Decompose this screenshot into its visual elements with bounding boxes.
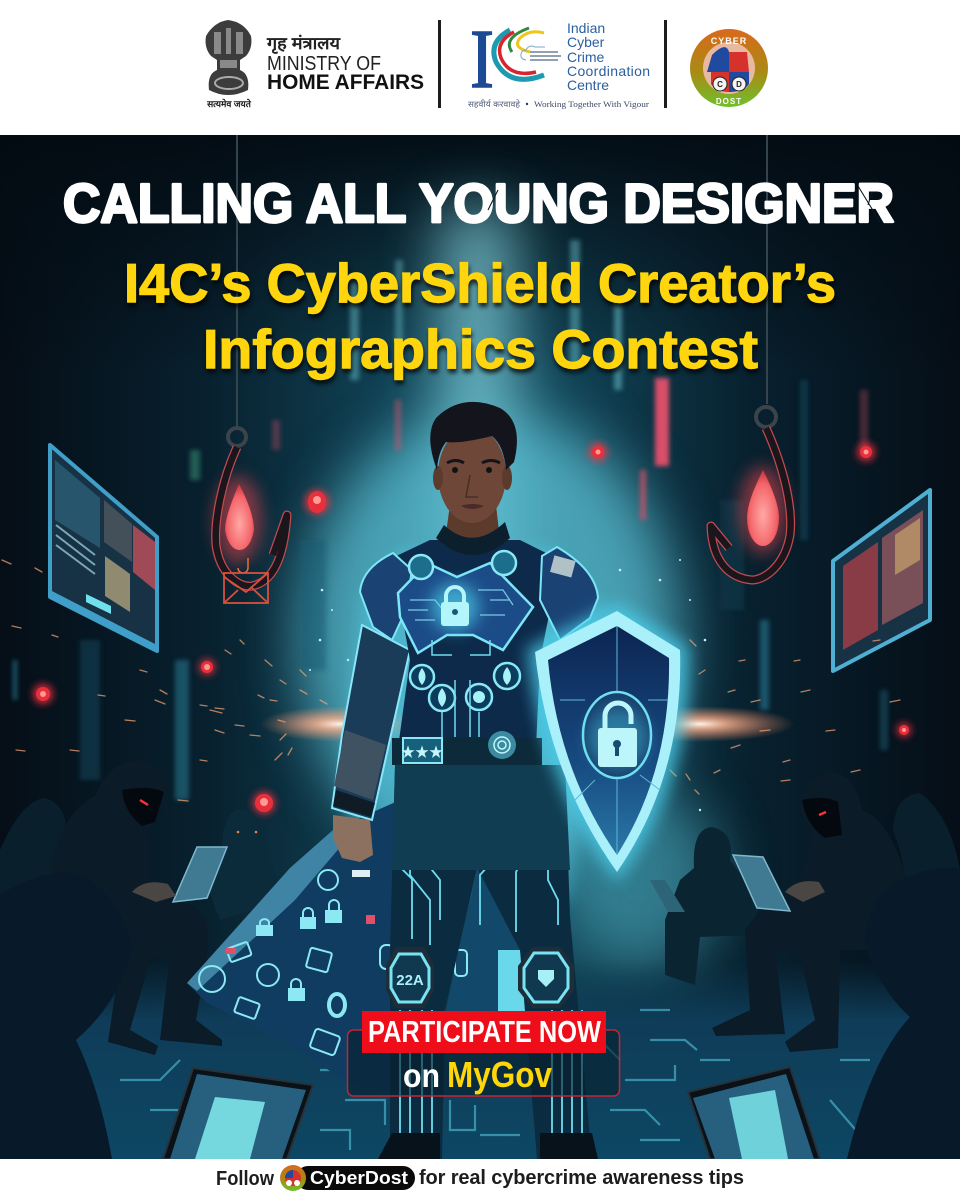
chest icons <box>410 663 520 711</box>
logo: Cyber Dost: C <box>717 80 723 89</box>
hero figure <box>187 402 600 1159</box>
logo: Indian Cyber Crime Coordination Centre: Coordination <box>567 63 650 79</box>
red malware bugs <box>33 443 911 964</box>
main hacker <box>712 826 906 1052</box>
icon: chest lock <box>431 583 479 631</box>
header band <box>0 0 960 135</box>
orange sparks <box>2 559 900 821</box>
glow around the hero <box>340 548 600 900</box>
left phishing hook with email <box>214 135 287 603</box>
footer band: for real cybercrime awareness tips <box>419 1167 744 1189</box>
footer band <box>0 1159 960 1200</box>
left shoulder <box>360 553 412 640</box>
main hacker <box>58 810 222 1055</box>
outlined MyGov box: on <box>403 1057 440 1094</box>
call to action <box>348 1011 620 1096</box>
circuit floor <box>76 970 910 1159</box>
left arm and hand <box>332 625 410 862</box>
logo: Cyber Dost: CYBER <box>711 36 747 46</box>
glowing shield with lock <box>527 603 688 882</box>
icon: state emblem of India <box>206 20 252 109</box>
foreground laptops <box>163 1067 820 1159</box>
logo: Indian Cyber Crime Coordination Centre: Cyber <box>567 34 605 50</box>
title: Calling all young designer: CALLING ALL YOUNG DESIGNER <box>63 172 894 234</box>
logo: Indian Cyber Crime Coordination Centre: Crime <box>567 49 605 65</box>
outlined MyGov box <box>348 1030 620 1096</box>
logo: Cyber Dost: DOST <box>716 97 742 106</box>
far-left background hacker <box>0 798 66 895</box>
far-right background hacker <box>893 793 960 878</box>
right shoulder <box>540 547 598 640</box>
legs <box>378 767 598 1159</box>
rear hacker beyond the laptop <box>210 829 226 920</box>
cape <box>187 802 525 1072</box>
subtitle: contest name <box>124 252 836 380</box>
legs: 22A <box>396 972 424 989</box>
logo: Cyber Dost: D <box>736 80 742 89</box>
CyberDost handle pill: CyberDost <box>310 1168 408 1188</box>
left hackers <box>0 760 282 1159</box>
right floating screen <box>833 490 930 671</box>
head <box>430 402 517 555</box>
icon: envelope <box>224 573 268 603</box>
foreground hacker <box>0 873 132 1159</box>
foreground hacker <box>847 868 960 1159</box>
right phishing hook <box>711 135 791 580</box>
right hackers <box>650 772 960 1159</box>
logo: Indian Cyber Crime Coordination Centre <box>468 13 650 109</box>
icon: state emblem of India: सत्यमेव जयते <box>206 98 252 109</box>
logo: Cyber Dost <box>690 29 768 107</box>
logo: Indian Cyber Crime Coordination Centre: I <box>470 13 494 106</box>
logo: Indian Cyber Crime Coordination Centre: Centre <box>567 77 609 93</box>
armoured torso <box>360 540 598 870</box>
chest plate <box>398 563 533 653</box>
ministry name <box>266 34 424 94</box>
outlined MyGov box: MyGov <box>447 1054 552 1095</box>
ministry name: HOME AFFAIRS <box>267 71 424 94</box>
subtitle: contest name: I4C’s CyberShield Creator’s <box>124 252 836 314</box>
left floating screen <box>50 445 157 652</box>
footer band: Follow <box>216 1168 274 1190</box>
mid background hacker <box>665 827 752 985</box>
red participate banner: PARTICIPATE NOW <box>368 1014 602 1049</box>
logo: Indian Cyber Crime Coordination Centre: Indian <box>567 20 605 36</box>
ministry name: गृह मंत्रालय <box>266 34 341 54</box>
subtitle: contest name: Infographics Contest <box>203 318 758 380</box>
armoured torso: ★★★ <box>401 744 443 760</box>
ministry name: MINISTRY OF <box>267 53 381 75</box>
icon: shield padlock <box>598 703 637 767</box>
logo: Indian Cyber Crime Coordination Centre: Working Together With Vigour <box>534 100 649 109</box>
logo: Indian Cyber Crime Coordination Centre: सहवीर्य करवावहे <box>468 99 520 109</box>
belt <box>392 738 542 765</box>
CyberDost handle pill <box>280 1165 415 1191</box>
